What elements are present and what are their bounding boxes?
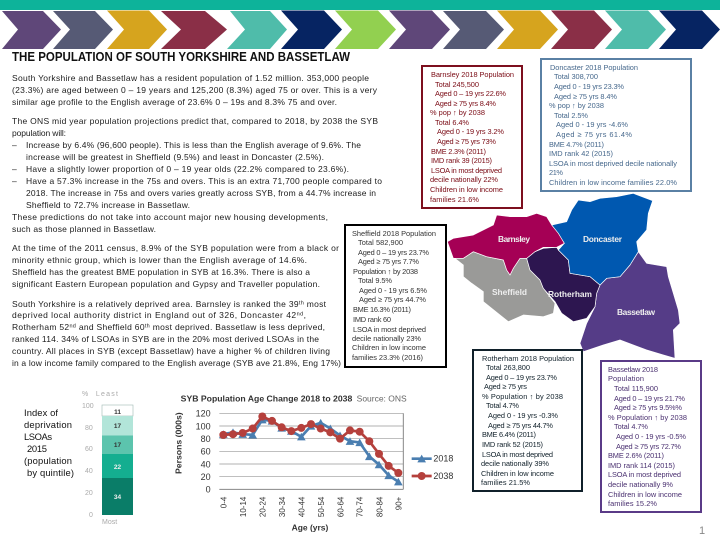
- text block: population projections: population will:: [12, 128, 66, 138]
- map labels: Doncaster: [583, 234, 623, 244]
- text block: population projections: These predictions do not take into account major new housing developments,: [12, 212, 328, 222]
- panel: Barnsley stats: Aged 0 - 19 yrs 3.2%: [437, 127, 504, 136]
- panel: Sheffield stats: Total 582,900: [358, 238, 403, 247]
- deprivation label: by quintile): [27, 467, 74, 478]
- y axis title: Persons (000s): [174, 412, 183, 474]
- map labels: Rotherham: [548, 289, 592, 299]
- text block: deprivation: most: [304, 299, 327, 309]
- panel: Sheffield stats: IMD rank 60: [353, 315, 391, 324]
- stack axis labels: 20: [85, 490, 93, 497]
- panel: Doncaster stats: LSOA in most deprived decile nationally: [549, 159, 677, 168]
- x axis labels: 0-4: [220, 496, 229, 508]
- panel: Bassetlaw stats: Total 4.7%: [614, 422, 648, 431]
- page number: 1: [699, 525, 705, 537]
- deprivation label: LSOAs: [24, 431, 52, 442]
- stack axis labels: 0: [89, 512, 93, 519]
- panel: Rotherham stats: Aged ≥ 75 yrs 44.7%: [488, 421, 553, 430]
- text block: deprivation: [12, 299, 341, 368]
- panel: Doncaster stats: Children in low income families 22.0%: [549, 178, 677, 187]
- panel: Doncaster stats: % pop ↑ by 2038: [549, 101, 604, 110]
- x axis labels: 90+: [395, 496, 404, 510]
- panel: Barnsley stats: BME 2.3% (2011): [431, 147, 486, 156]
- legend: 2018: [433, 454, 453, 464]
- panel: Bassetlaw stats: Aged 0 - 19 yrs -0.5%: [616, 432, 686, 441]
- panel: Bassetlaw stats: [601, 361, 701, 512]
- text block: deprivation: in a low income family compared to the English average (SYB ave 21.8%, Eng 17%): [12, 358, 341, 368]
- panel: Doncaster stats: Aged ≥ 75 yrs 8.4%: [554, 92, 617, 101]
- panel: Rotherham stats: Total 4.7%: [486, 401, 519, 410]
- y axis labels: 120: [196, 409, 211, 419]
- panel: Bassetlaw stats: Children in low income: [608, 490, 682, 499]
- panel: Doncaster stats: [541, 59, 691, 191]
- text block: population projections: –: [12, 140, 17, 150]
- panel: Barnsley stats: Total 245,500: [435, 80, 479, 89]
- panel: Bassetlaw stats: families 15.2%: [608, 499, 657, 508]
- y axis labels: 20: [201, 472, 211, 482]
- x axis labels: 60-64: [336, 496, 345, 517]
- y axis labels: 60: [201, 447, 211, 457]
- map region: Sheffield: [455, 252, 555, 322]
- panel: Bassetlaw stats: % Population ↑ by 2038: [608, 413, 687, 422]
- text block: deprivation: th: [299, 300, 304, 306]
- panel: Sheffield stats: Aged ≥ 75 yrs 7.7%: [358, 257, 419, 266]
- panel: Rotherham stats: BME 6.4% (2011): [482, 430, 536, 439]
- text block: deprivation: South Yorkshire is a relatively deprived area. Barnsley is ranked the 39: [12, 299, 299, 309]
- stack axis labels: [82, 391, 118, 526]
- x axis labels: 50-54: [317, 496, 326, 517]
- top teal band: [0, 0, 720, 10]
- text block: population projections: increase will be greatest in Sheffield (9.5%) and least in Doncaster (2.5%).: [26, 152, 324, 162]
- panel: Doncaster stats: Aged 0 - 19 yrs 23.3%: [554, 82, 624, 91]
- chart title: SYB Population Age Change 2018 to 2038: [181, 394, 353, 404]
- deprivation label: [24, 407, 74, 478]
- panel: Doncaster stats: IMD rank 42 (2015): [549, 149, 613, 158]
- legend: 2038: [433, 471, 453, 481]
- panel: Doncaster stats: Total 2.5%: [554, 111, 588, 120]
- y axis labels: [196, 409, 211, 495]
- panel: Barnsley stats: [422, 66, 522, 208]
- text block: population projections: Have a slightly lower proportion of 0 – 19 year olds (22.2% compared to 23.6%).: [26, 164, 349, 174]
- text block: ethnicity: [12, 243, 339, 289]
- panel: Doncaster stats: 21%: [549, 168, 563, 177]
- panel: Rotherham stats: LSOA in most deprived: [482, 450, 553, 459]
- stack values: [114, 409, 121, 501]
- panel: Sheffield stats: Aged 0 – 19 yrs 23.7%: [358, 248, 429, 257]
- panel: Barnsley stats: Children in low income: [430, 185, 503, 194]
- deprivation label: Index of: [24, 407, 58, 418]
- panel: Sheffield stats: Aged 0 - 19 yrs 6.5%: [359, 286, 427, 295]
- panel: Barnsley stats: Aged ≥ 75 yrs 8.4%: [435, 99, 496, 108]
- text block: population projections: such as those planned in Bassetlaw.: [12, 224, 156, 234]
- panel: Doncaster stats: Aged ≥ 75 yrs 61.4%: [556, 130, 632, 139]
- stack values: 34: [114, 494, 121, 501]
- panel: Barnsley stats: Aged ≥ 75 yrs 73%: [437, 137, 496, 146]
- text block: ethnicity: Sheffield has the greatest BME population in SYB at 16.3%. There is also a: [12, 267, 310, 277]
- stack axis labels: 100: [82, 403, 94, 410]
- text block: population projections: –: [12, 176, 17, 186]
- text block: population projections: Have a 57.3% increase in the 75s and overs. This is an extra 71,700 people compared to: [26, 176, 382, 186]
- panel: Doncaster stats: Aged 0 - 19 yrs -4.6%: [556, 120, 628, 129]
- deprivation label: (population: [24, 455, 72, 466]
- text block: deprivation: th: [145, 324, 150, 330]
- panel: Sheffield stats: families 23.3% (2016): [352, 353, 423, 362]
- x axis labels: 80-84: [375, 496, 384, 517]
- text block: deprivation: nd: [297, 312, 303, 318]
- map region: Bassetlaw: [580, 252, 680, 358]
- text block: deprivation: most deprived. Bassetlaw is less deprived,: [150, 322, 325, 332]
- text block: deprivation: deprived local authority district in England out of 326, Doncaster 42: [12, 310, 296, 320]
- text block: deprivation: ,: [304, 310, 306, 320]
- x axis title: Age (yrs): [292, 524, 329, 533]
- panel: Bassetlaw stats: decile nationally 9%: [608, 480, 673, 489]
- y axis labels: 80: [201, 434, 211, 444]
- stack axis labels: 60: [85, 446, 93, 453]
- panel: Sheffield stats: Total 9.5%: [358, 276, 392, 285]
- panel: Sheffield stats: Children in low income: [352, 343, 426, 352]
- panel: Bassetlaw stats: Bassetlaw 2018: [608, 365, 658, 374]
- panel: Sheffield stats: Sheffield 2018 Population: [352, 229, 436, 238]
- text block: deprivation: country. All places in SYB (except Bassetlaw) have a higher % of children living: [12, 346, 330, 356]
- panel: Rotherham stats: Total 263,800: [486, 363, 530, 372]
- stack axis labels: Most: [102, 519, 117, 526]
- panel: Sheffield stats: [345, 225, 446, 367]
- text block: population projections: The ONS mid year population projections predict that, compared to 2018, by 2038 the SYB: [12, 116, 378, 126]
- map labels: Bassetlaw: [617, 307, 655, 317]
- line chart: SYB population age change: [174, 394, 453, 533]
- y axis labels: 100: [196, 421, 211, 431]
- panel: Sheffield stats: Population ↑ by 2038: [353, 267, 418, 276]
- map region: Doncaster: [552, 193, 653, 285]
- y axis labels: 0: [206, 485, 211, 495]
- map labels: Sheffield: [492, 287, 527, 297]
- panel: Rotherham stats: decile nationally 39%: [481, 459, 549, 468]
- panel: Barnsley stats: decile nationally 22%: [430, 175, 498, 184]
- panel: Rotherham stats: % Population ↑ by 2038: [482, 392, 563, 401]
- stack axis labels: 80: [85, 425, 93, 432]
- text block: ethnicity: At the time of the 2011 census, 8.9% of the SYB population were from a black or: [12, 243, 339, 253]
- panel: Barnsley stats: Total 6.4%: [435, 118, 469, 127]
- panel: Bassetlaw stats: IMD rank 114 (2015): [608, 461, 675, 470]
- deprivation label: deprivation: [24, 419, 72, 430]
- stack values: 11: [114, 409, 121, 416]
- panel: Rotherham stats: [473, 350, 582, 491]
- panel: Rotherham stats: Aged ≥ 75 yrs: [484, 382, 527, 391]
- panel: Doncaster stats: BME 4.7% (2011): [549, 140, 604, 149]
- stack values: 17: [114, 423, 121, 430]
- map region: Rotherham: [527, 247, 600, 322]
- stack axis labels: % Least: [82, 391, 118, 398]
- x axis labels: 20-24: [259, 496, 268, 517]
- panel: Bassetlaw stats: Aged 0 – 19 yrs 21.7%: [614, 394, 685, 403]
- text block: deprivation: and Sheffield 60: [76, 322, 145, 332]
- x axis labels: [220, 496, 404, 517]
- text block: deprivation: Rotherham 52: [12, 322, 69, 332]
- chevron banner: [2, 10, 720, 49]
- panel: Barnsley stats: Aged 0 – 19 yrs 22.6%: [435, 89, 506, 98]
- panel: Doncaster stats: Total 308,700: [554, 72, 598, 81]
- x axis labels: 70-74: [355, 496, 364, 517]
- text block: resident population: (23.3%) are aged between 0 – 19 years and 125,200 (8.3%) aged 75 or over. This is a very: [12, 85, 378, 95]
- stacked bar: deprivation quintiles: [82, 391, 133, 526]
- text block: population projections: Increase by 6.4% (96,600 people). This is less than the English average of 9.6%. The: [26, 140, 361, 150]
- series 2038: [223, 416, 398, 473]
- text block: resident population: [12, 73, 378, 107]
- x axis labels: 40-44: [297, 496, 306, 517]
- panel: Rotherham stats: families 21.5%: [481, 478, 530, 487]
- text block: deprivation: ranked 114. 34% of LSOAs in SYB are in the 20% most derived LSOAs in the: [12, 334, 319, 344]
- panel: Bassetlaw stats: Total 115,900: [614, 384, 658, 393]
- panel: Bassetlaw stats: Aged ≥ 75 yrs 9.5%%: [614, 403, 682, 412]
- text block: population projections: Sheffield to 72.7% increase in Bassetlaw.: [26, 200, 190, 210]
- x axis labels: 30-34: [278, 496, 287, 517]
- panel: Sheffield stats: LSOA in most deprived: [353, 325, 426, 334]
- panel: Sheffield stats: Aged ≥ 75 yrs 44.7%: [359, 295, 426, 304]
- stack values: 17: [114, 442, 121, 449]
- panel: Bassetlaw stats: LSOA in most deprived: [608, 470, 681, 479]
- text block: population projections: [12, 116, 382, 234]
- stack values: 22: [114, 464, 121, 471]
- panel: Doncaster stats: Doncaster 2018 Population: [550, 63, 638, 72]
- map region: Barnsley: [447, 213, 564, 275]
- stack axis labels: 40: [85, 468, 93, 475]
- panel: Rotherham stats: IMD rank 52 (2015): [482, 440, 543, 449]
- deprivation label: 2015: [27, 443, 47, 454]
- panel: Bassetlaw stats: Population: [608, 374, 644, 383]
- map labels: Barnsley: [498, 234, 530, 244]
- series 2018: [223, 420, 398, 482]
- panel: Bassetlaw stats: Aged ≥ 75 yrs 72.7%: [616, 442, 681, 451]
- text block: ethnicity: minority ethnic group, which is lower than the English average of 14.6%.: [12, 255, 307, 265]
- panel: Rotherham stats: Aged 0 - 19 yrs -0.3%: [488, 411, 558, 420]
- map labels: [492, 234, 655, 317]
- legend: [412, 454, 453, 481]
- title: THE POPULATION OF SOUTH YORKSHIRE AND BASSETLAW: [12, 50, 350, 64]
- chart source: Source: ONS: [357, 394, 407, 404]
- y axis labels: 40: [201, 459, 211, 469]
- panel: Barnsley stats: families 21.6%: [430, 195, 479, 204]
- panel: Barnsley stats: IMD rank 39 (2015): [431, 156, 492, 165]
- text block: ethnicity: significant Eastern European population and Gypsy and Traveller population.: [12, 279, 320, 289]
- panel: Barnsley stats: % pop ↑ by 2038: [430, 108, 485, 117]
- text block: resident population: South Yorkshire and Bassetlaw has a resident population of 1.52 million. 353,000 people: [12, 73, 369, 83]
- panel: Barnsley stats: Barnsley 2018 Population: [431, 70, 514, 79]
- text block: population projections: –: [12, 164, 17, 174]
- panel: Rotherham stats: Aged 0 – 19 yrs 23.7%: [486, 373, 557, 382]
- panel: Bassetlaw stats: BME 2.6% (2011): [608, 451, 664, 460]
- panel: Rotherham stats: Rotherham 2018 Population: [482, 354, 574, 363]
- panel: Barnsley stats: LSOA in most deprived: [431, 166, 502, 175]
- text block: population projections: 2018. The increase in 75s and overs varies greatly across SYB, from a 44.7% increase in: [26, 188, 376, 198]
- panel: Sheffield stats: BME 16.3% (2011): [353, 305, 411, 314]
- panel: Rotherham stats: Children in low income: [481, 469, 554, 478]
- panel: Sheffield stats: decile nationally 23%: [352, 334, 421, 343]
- text block: deprivation: nd: [69, 324, 76, 330]
- text block: resident population: similar age profile to the English average of 23.6% 0 – 19s and 8.3% 75 and over.: [12, 97, 337, 107]
- map: South Yorkshire and Bassetlaw districts: [447, 193, 680, 358]
- x axis labels: 10-14: [239, 496, 248, 517]
